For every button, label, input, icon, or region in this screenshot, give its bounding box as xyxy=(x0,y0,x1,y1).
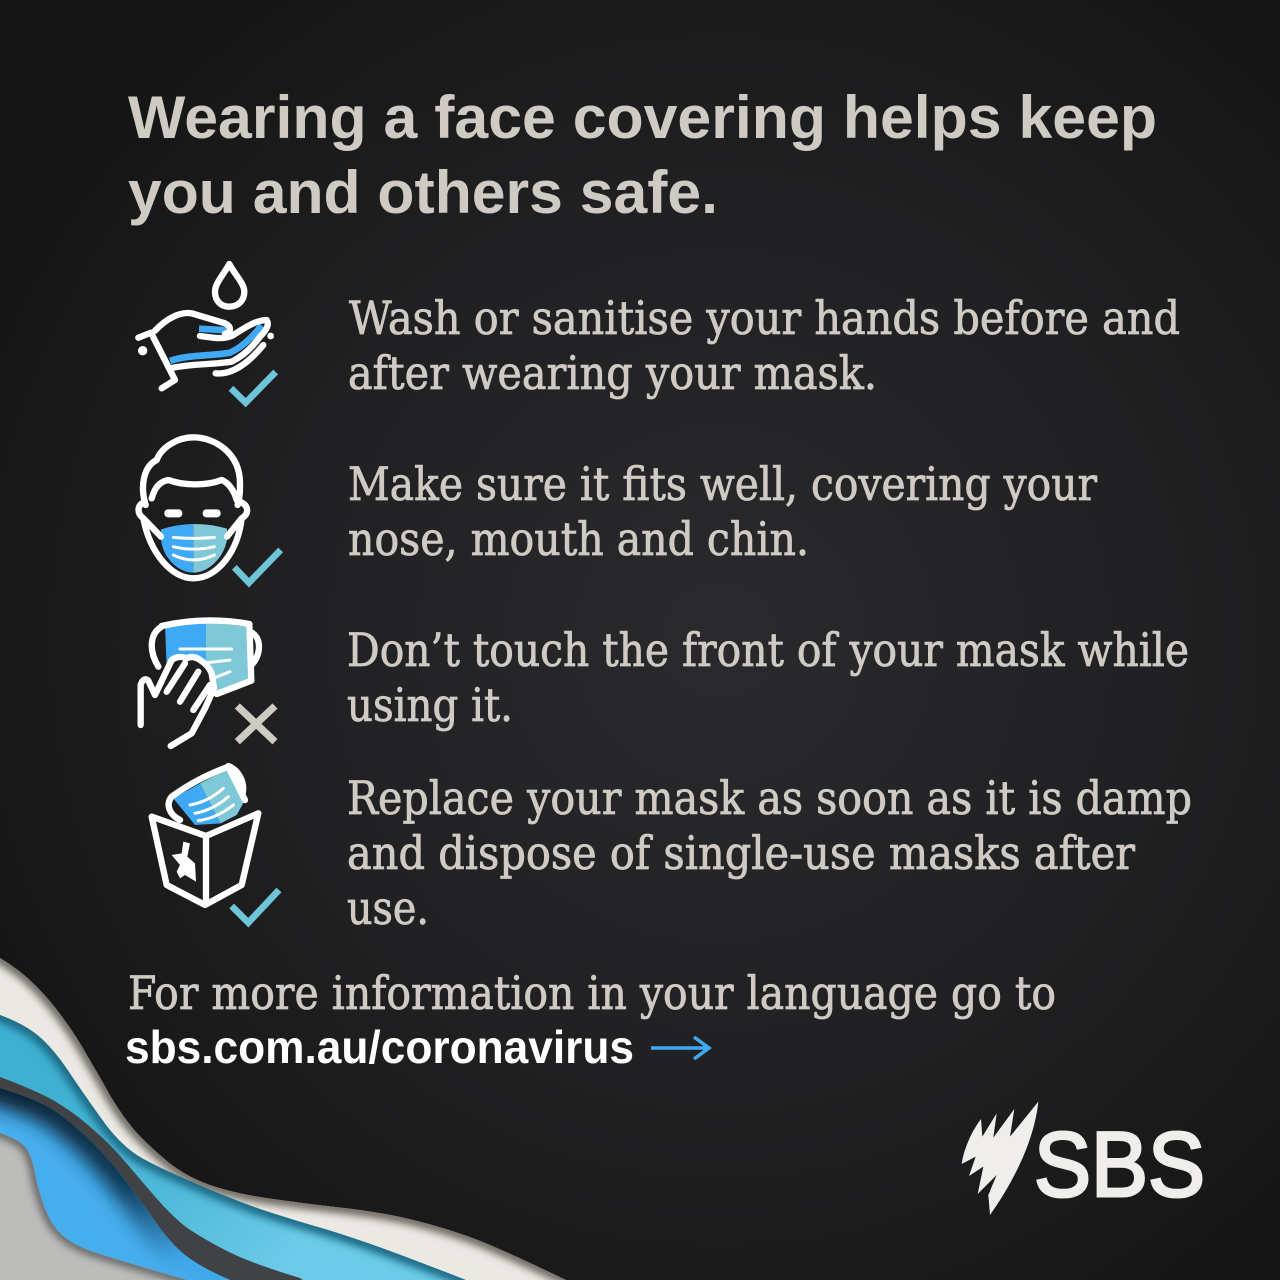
text: fit: Make sure it fits well, covering your xyxy=(348,457,1097,511)
text: more information: For more information in your language go to xyxy=(128,966,1056,1020)
text: replace: Replace your mask as soon as it is damp xyxy=(347,771,1192,825)
icon: hand touching mask with cross xyxy=(141,620,275,746)
text: fit: nose, mouth and chin. xyxy=(348,512,809,566)
text: replace: use. xyxy=(347,881,429,935)
text: don't touch: Don’t touch the front of your mask while xyxy=(347,623,1189,677)
text: wash hands xyxy=(348,291,1180,400)
title xyxy=(128,84,1157,226)
text: fit xyxy=(348,457,1097,566)
icon: face with mask and check xyxy=(139,437,281,583)
icon: mask in bin with check xyxy=(152,766,279,923)
text: wash hands: Wash or sanitise your hands before and xyxy=(349,291,1180,345)
text: replace xyxy=(347,771,1192,935)
arrow xyxy=(651,1037,709,1059)
text: don't touch: using it. xyxy=(347,678,513,732)
logo: SBS xyxy=(962,1102,1205,1216)
decorative paper-cut waves xyxy=(0,958,566,1280)
text: replace: and dispose of single-use masks after xyxy=(347,826,1135,880)
text: wash hands: after wearing your mask. xyxy=(348,346,877,400)
icon: hand washing with check xyxy=(138,264,276,403)
title: you and others safe. xyxy=(128,159,718,226)
title: Wearing a face covering helps keep xyxy=(128,84,1157,151)
text: don't touch xyxy=(347,623,1189,732)
link: sbs.com.au/coronavirus xyxy=(125,1021,634,1073)
logo: SBS: SBS xyxy=(1034,1114,1205,1216)
